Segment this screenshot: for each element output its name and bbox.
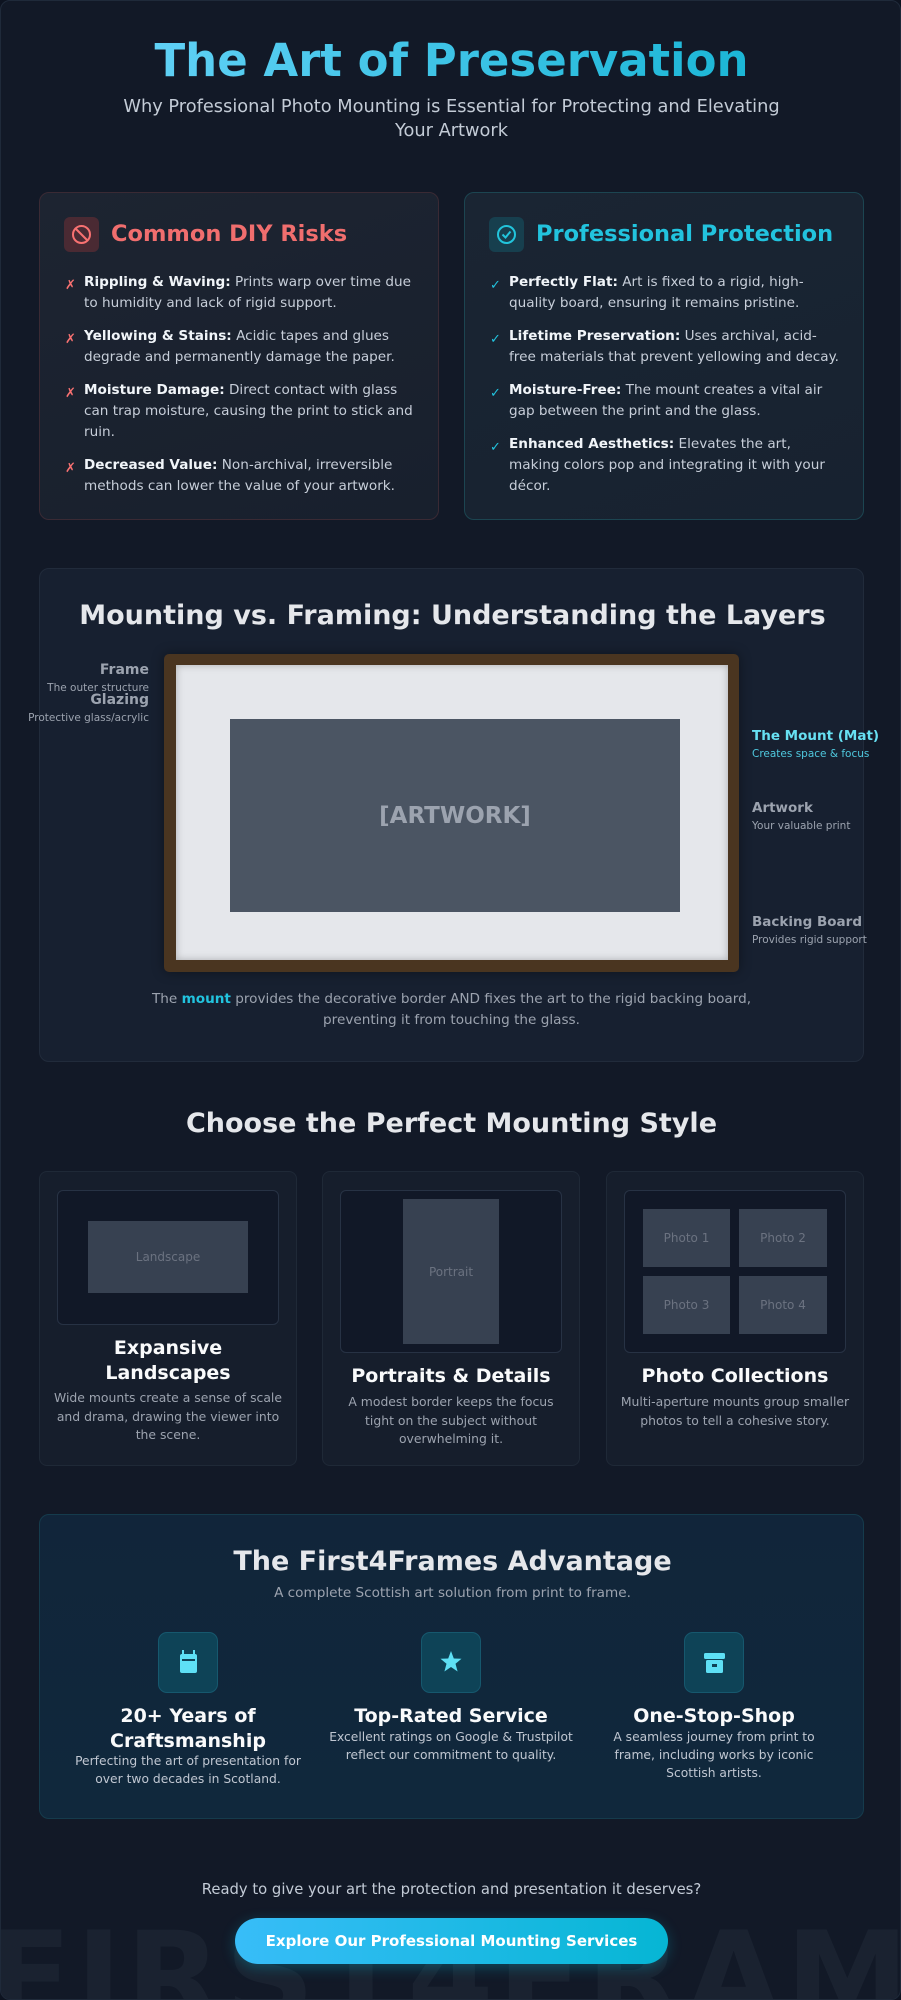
icon: check circle — [489, 217, 524, 252]
advantage: years — [75, 1705, 301, 1786]
title: The Art of Preservation — [154, 34, 749, 87]
CTA text: Ready to give your art the protection and presentation it deserves? — [202, 1881, 701, 1898]
advantage: one-stop-shop: One-Stop-Shop — [633, 1705, 795, 1727]
risk list: ✗ — [65, 332, 76, 347]
risk list: ✗ — [65, 278, 76, 293]
card: collections — [606, 1171, 864, 1466]
preview: landscape: Landscape — [136, 1250, 200, 1264]
protection list: ✓ — [490, 440, 501, 455]
risk list: Decreased Value: Non-archival, irreversible methods can lower the value of your artwork. — [84, 457, 395, 494]
CTA button — [235, 1918, 668, 1964]
title: landscapes: Landscapes — [105, 1362, 231, 1384]
preview: portrait — [340, 1190, 562, 1353]
protection list: Moisture-Free: The mount creates a vital air gap between the print and the glass. — [509, 382, 822, 419]
preview: collection: Photo 2 — [760, 1231, 806, 1245]
card: portraits — [322, 1171, 580, 1466]
preview: collection: Photo 4 — [760, 1298, 806, 1312]
subtitle: Why Professional Photo Mounting is Essential for Protecting and Elevating Your Artwork — [123, 96, 780, 141]
heading: advantage: The First4Frames Advantage — [233, 1546, 672, 1577]
heading: layers: Mounting vs. Framing: Understanding the Layers — [79, 600, 826, 631]
label: artwork: Artwork — [752, 800, 813, 816]
advantage: one-stop-shop — [613, 1705, 815, 1780]
label: backing board: Backing Board — [752, 914, 862, 930]
title: portraits: Portraits & Details — [351, 1365, 551, 1387]
risk list: ✗ — [65, 461, 76, 476]
protection list: ✓ — [490, 278, 501, 293]
panel: advantage — [39, 1514, 864, 1819]
mount — [176, 665, 728, 960]
protection list: Lifetime Preservation: Uses archival, acid- — [509, 328, 817, 344]
panel: common DIY risks — [39, 192, 439, 520]
icon: archive box — [684, 1632, 744, 1693]
title: landscapes — [105, 1337, 231, 1384]
preview: collection: Photo 1 — [664, 1231, 709, 1245]
label: glazing: Glazing — [90, 692, 149, 708]
subheading: advantage: A complete Scottish art solution from print to frame. — [274, 1585, 631, 1601]
desc: landscapes: the scene. — [136, 1427, 200, 1442]
desc: landscapes: Wide mounts create a sense of scale — [54, 1390, 282, 1405]
risk list: Yellowing & Stains: Acidic tapes and glues degrade and permanently damage the paper. — [84, 328, 395, 365]
label: backing sub: Provides rigid support — [752, 934, 867, 946]
risk list: Moisture Damage: Direct contact with glass can trap moisture, causing the print to stick and ruin. — [84, 382, 413, 440]
title: collections: Photo Collections — [642, 1365, 828, 1387]
panel: professional protection — [464, 192, 864, 520]
protection list: making colors pop and integrating it with your — [509, 457, 825, 473]
preview: portrait: Portrait — [429, 1264, 473, 1278]
artwork — [230, 719, 680, 912]
advantage: top-rated: Excellent ratings on Google & Trustpilot reflect our commitment to quality. — [329, 1730, 573, 1762]
diagram: frame — [164, 654, 739, 972]
protection list: décor. — [509, 478, 550, 494]
icon: star — [421, 1632, 481, 1693]
desc: collections: Multi-aperture mounts group smaller photos to tell a cohesive story. — [621, 1394, 849, 1428]
advantage: years: 20+ Years of — [120, 1705, 256, 1727]
advantage: years: Craftsmanship — [110, 1730, 266, 1752]
advantage: top-rated: Top-Rated Service — [354, 1705, 548, 1727]
heading: mounting styles: Choose the Perfect Mounting Style — [186, 1108, 717, 1139]
artwork: [ARTWORK] — [379, 802, 531, 828]
icon: calendar — [158, 1632, 218, 1693]
protection list: Perfectly Flat: Art is fixed to a rigid, high-quality board, ensuring it remains pristine. — [509, 274, 804, 311]
label: frame sub: The outer structure — [47, 682, 149, 694]
risk list: Rippling & Waving: Prints warp over time due to humidity and lack of rigid support. — [84, 274, 411, 311]
label: mount: The Mount (Mat) — [752, 728, 879, 744]
CTA button: Explore Our Professional Mounting Services — [266, 1932, 637, 1950]
heading: risks: Common DIY Risks — [111, 221, 347, 247]
card: landscapes — [39, 1171, 297, 1466]
protection list: ✓ — [490, 332, 501, 347]
desc: portraits: A modest border keeps the focus tight on the subject without overwhelming it. — [348, 1394, 554, 1446]
protection list: Enhanced Aesthetics: Elevates the art, — [509, 436, 791, 452]
desc: landscapes — [54, 1390, 282, 1442]
protection list: ✓ — [490, 386, 501, 401]
advantage: top-rated — [329, 1705, 573, 1762]
heading: protection: Professional Protection — [536, 221, 833, 247]
risk list — [65, 274, 413, 494]
label: glazing sub: Protective glass/acrylic — [28, 712, 149, 724]
icon: prohibited — [64, 217, 99, 252]
preview: collection: Photo 3 — [664, 1298, 709, 1312]
protection list: free materials that prevent yellowing and decay. — [509, 349, 839, 365]
title: landscapes: Expansive — [114, 1337, 222, 1359]
preview: collection — [624, 1190, 846, 1353]
label: artwork sub: Your valuable print — [752, 820, 850, 832]
advantage: years: Perfecting the art of presentation for over two decades in Scotland. — [75, 1754, 301, 1786]
advantage: one-stop-shop: A seamless journey from print to frame, including works by iconic Scottish artists. — [613, 1730, 815, 1780]
panel: layers diagram — [39, 568, 864, 1062]
preview: landscape — [57, 1190, 279, 1325]
label: mount sub: Creates space & focus — [752, 748, 869, 760]
risk list: ✗ — [65, 386, 76, 401]
protection list — [490, 274, 839, 494]
caption: mount explanation: The mount provides the decorative border AND fixes the art to the rigid backing board, preventing it from touching the glass. — [152, 991, 751, 1028]
desc: landscapes: and drama, drawing the viewer into — [57, 1408, 279, 1424]
label: frame: Frame — [100, 662, 149, 678]
